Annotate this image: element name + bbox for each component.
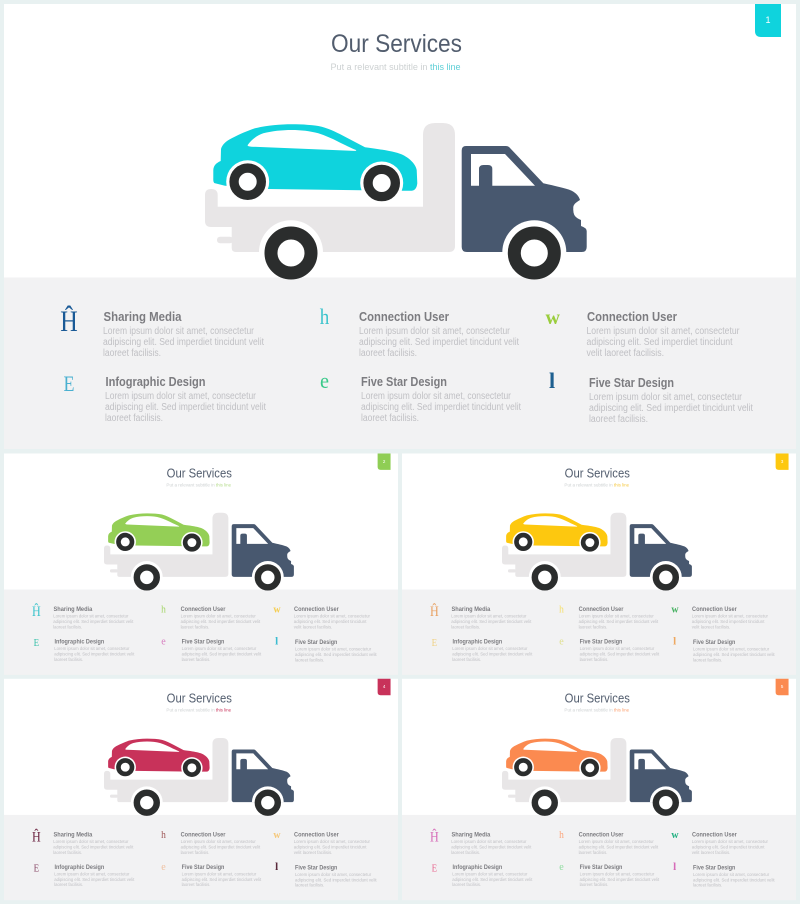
item text: Lorem ipsum dolor sit amet, consectetur (294, 839, 370, 845)
icon: E: E (64, 371, 74, 396)
item text (692, 614, 768, 631)
service item: Five Star Design (320, 368, 521, 424)
item text: laoreet facilisis. (53, 625, 82, 631)
item text: laoreet facilisis. (579, 625, 607, 631)
item text: adipiscing elit. Sed imperdiet tincidunt velit (53, 844, 134, 850)
item text: Lorem ipsum dolor sit amet, consectetur (54, 646, 130, 652)
item text: laoreet facilisis. (580, 657, 608, 663)
item text: adipiscing elit. Sed imperdiet tincidunt velit (589, 403, 753, 414)
item title: Five Star Design (182, 864, 224, 871)
services panel background (4, 278, 796, 449)
item text: adipiscing elit. Sed imperdiet tincidunt velit (182, 651, 262, 657)
icon: E: E (34, 862, 39, 874)
item text: laoreet facilisis. (451, 625, 480, 631)
item text: adipiscing elit. Sed imperdiet tincidunt velit (579, 619, 659, 625)
item text (586, 326, 740, 359)
item title: Connection User (181, 832, 226, 839)
service item: Connection User 2 (671, 830, 768, 856)
item text (452, 646, 533, 663)
item text (589, 392, 753, 425)
service item: Connection User (559, 604, 659, 631)
icon: E: E (432, 637, 437, 649)
icon: tow truck carrying car (502, 513, 692, 587)
icon: h: h (320, 304, 329, 329)
item text: Lorem ipsum dolor sit amet, consectetur (692, 839, 768, 845)
item text: Lorem ipsum dolor sit amet, consectetur (361, 391, 512, 402)
item text: Lorem ipsum dolor sit amet, consectetur (580, 646, 655, 652)
subtitle (564, 708, 629, 714)
item text: adipiscing elit. Sed imperdiet tincidunt velit (579, 844, 659, 850)
item title: Five Star Design (693, 864, 735, 871)
item text: Lorem ipsum dolor sit amet, consectetur (181, 839, 256, 845)
icon: e: e (320, 368, 329, 393)
service item: Infographic Design (34, 862, 135, 888)
slide background (402, 454, 796, 590)
service item: Connection User 2 (671, 605, 768, 631)
item text (54, 646, 135, 663)
item text (295, 872, 377, 889)
item text: Lorem ipsum dolor sit amet, consectetur (181, 614, 256, 620)
item text: laoreet facilisis. (54, 882, 83, 888)
icon: l: l (673, 861, 676, 873)
service item: Five Star Design (161, 636, 262, 663)
item text: adipiscing elit. Sed imperdiet tincidunt velit (361, 402, 521, 413)
icon: e: e (161, 636, 166, 648)
page badge: 3 (781, 459, 784, 464)
item text: Lorem ipsum dolor sit amet, consectetur (692, 614, 768, 620)
service item: Five Star Design 2 (673, 636, 775, 663)
icon: h: h (161, 604, 166, 616)
item title: Infographic Design (452, 864, 502, 871)
item title: Connection User (692, 832, 737, 839)
item text: laoreet facilisis. (361, 413, 419, 424)
item text: Lorem ipsum dolor sit amet, consectetur (295, 872, 371, 878)
item text (105, 391, 266, 424)
item title: Sharing Media (54, 832, 93, 839)
item title: Connection User (587, 309, 677, 324)
title: Our Services (331, 30, 462, 58)
service item: Connection User (320, 304, 519, 359)
item text: laoreet facilisis. (181, 625, 209, 631)
item title: Five Star Design (580, 639, 622, 646)
item text: adipiscing elit. Sed imperdiet tincidunt velit (54, 651, 135, 657)
item text: laoreet facilisis. (693, 657, 722, 663)
services panel background (4, 590, 398, 675)
item text: laoreet facilisis. (105, 413, 163, 424)
service item: Connection User 2 (273, 605, 370, 631)
item text: adipiscing elit. Sed imperdiet tincidunt velit (105, 402, 266, 413)
services panel background (4, 815, 398, 900)
item text (451, 839, 532, 856)
item text: laoreet facilisis. (451, 850, 480, 856)
service item: Infographic Design (432, 862, 533, 888)
item text: Lorem ipsum dolor sit amet, consectetur (451, 614, 527, 620)
item title: Five Star Design (361, 374, 447, 389)
item text: laoreet facilisis. (181, 850, 209, 856)
service item: Sharing Media (430, 603, 532, 631)
item title: Connection User (692, 606, 737, 613)
item text (580, 871, 660, 888)
icon: e: e (559, 636, 564, 648)
item text (54, 871, 135, 888)
item text: velit laoreet facilisis. (294, 625, 332, 631)
slide background (402, 679, 796, 815)
icon: h: h (161, 829, 166, 841)
item text: adipiscing elit. Sed imperdiet tincidunt (586, 337, 733, 348)
icon: tow truck carrying car (104, 513, 294, 587)
item text (579, 614, 659, 631)
item title: Connection User (294, 832, 339, 839)
item title: Five Star Design (295, 639, 337, 646)
service item: Five Star Design (161, 861, 262, 888)
service item: Infographic Design (34, 637, 135, 663)
icon: l: l (275, 861, 278, 873)
item text: Lorem ipsum dolor sit amet, consectetur (580, 871, 655, 877)
item text (103, 326, 264, 359)
service item: Five Star Design 2 (275, 636, 377, 663)
service item: Connection User (161, 829, 261, 856)
item text: Lorem ipsum dolor sit amet, consectetur (294, 614, 370, 620)
panel: main slide cyan (4, 4, 796, 449)
item text: Lorem ipsum dolor sit amet, consectetur (54, 871, 130, 877)
service item: Sharing Media (32, 603, 134, 631)
subtitle (564, 482, 629, 488)
service item: Infographic Design (64, 371, 266, 424)
subtitle: this line (216, 708, 231, 714)
item text: adipiscing elit. Sed imperdiet tincidunt velit (580, 877, 660, 883)
page badge: 1 (765, 15, 771, 25)
item text (181, 614, 261, 631)
item text (693, 647, 775, 663)
item text: laoreet facilisis. (103, 348, 161, 359)
item text: laoreet facilisis. (54, 657, 83, 663)
item text: adipiscing elit. Sed imperdiet tincidunt velit (181, 844, 261, 850)
item title: Five Star Design (580, 864, 622, 871)
icon: tow truck carrying car (205, 123, 587, 273)
item title: Connection User (579, 832, 624, 839)
item title: Infographic Design (106, 374, 206, 389)
subtitle: this line (614, 708, 629, 714)
icon: h: h (559, 829, 564, 841)
icon: H: Ĥ (430, 603, 439, 620)
service item: Connection User (559, 829, 659, 856)
item text: adipiscing elit. Sed imperdiet tincidunt velit (452, 877, 533, 883)
item text: adipiscing elit. Sed imperdiet tincidunt velit (451, 844, 532, 850)
services panel background (402, 815, 796, 900)
item title: Infographic Design (54, 864, 104, 871)
item text: Lorem ipsum dolor sit amet, consectetur (53, 614, 129, 620)
icon: tow truck carrying car (502, 738, 692, 813)
item text: laoreet facilisis. (182, 882, 210, 888)
item text: laoreet facilisis. (452, 657, 481, 663)
item text (182, 871, 262, 888)
item text: laoreet facilisis. (359, 348, 417, 359)
subtitle: this line (430, 62, 460, 73)
item text: adipiscing elit. Sed imperdiet tincidunt velit (182, 877, 262, 883)
item text: adipiscing elit. Sed imperdiet tincidunt velit (53, 619, 134, 625)
item text: Lorem ipsum dolor sit amet, consectetur (452, 871, 528, 877)
icon: w: w (273, 830, 281, 841)
icon: H: Ĥ (32, 828, 41, 845)
item text: Lorem ipsum dolor sit amet, consectetur (452, 646, 528, 652)
item title: Sharing Media (54, 606, 93, 613)
service item: Connection User 2 (273, 830, 370, 856)
item text: Lorem ipsum dolor sit amet, consectetur (693, 647, 769, 653)
item text: laoreet facilisis. (579, 850, 607, 856)
icon: l: l (275, 636, 278, 648)
page badge (776, 454, 789, 470)
item text: Lorem ipsum dolor sit amet, consectetur (586, 326, 740, 337)
item text: Lorem ipsum dolor sit amet, consectetur (182, 871, 257, 877)
item text: laoreet facilisis. (295, 657, 324, 663)
service item: Sharing Media (60, 305, 264, 359)
page badge (378, 679, 391, 695)
service item: Five Star Design 2 (673, 861, 775, 889)
item text: Lorem ipsum dolor sit amet, consectetur (693, 872, 769, 878)
item text (295, 647, 377, 663)
item text: Lorem ipsum dolor sit amet, consectetur (103, 326, 255, 337)
panel: small slide crimson (4, 679, 398, 900)
icon: h: h (559, 604, 564, 616)
item text (361, 391, 521, 424)
item text: laoreet facilisis. (53, 850, 82, 856)
item text (181, 839, 261, 856)
slide background (4, 4, 796, 278)
item text: Lorem ipsum dolor sit amet, consectetur (295, 647, 371, 653)
service item: Five Star Design (559, 636, 660, 663)
page badge: 4 (383, 684, 386, 689)
service item: Sharing Media (430, 828, 532, 856)
icon: e: e (161, 861, 166, 873)
panel: small slide orange (402, 679, 796, 900)
item text (359, 326, 519, 359)
item text: adipiscing elit. Sed imperdiet tincidunt velit (54, 877, 135, 883)
page badge: 5 (781, 684, 784, 689)
item text: Lorem ipsum dolor sit amet, consectetur (451, 839, 527, 845)
icon: E: E (34, 637, 39, 649)
item title: Connection User (579, 606, 624, 613)
item text (451, 614, 532, 631)
item title: Connection User (359, 309, 449, 324)
page badge (378, 454, 391, 470)
service item: Sharing Media (32, 828, 134, 856)
item text: laoreet facilisis. (452, 882, 481, 888)
page badge (776, 679, 789, 695)
service item: Connection User 2 (545, 307, 740, 359)
icon: H: Ĥ (60, 305, 78, 338)
item text: laoreet facilisis. (589, 414, 648, 425)
subtitle (166, 482, 231, 488)
service item: Five Star Design (559, 861, 660, 888)
item text (580, 646, 660, 663)
item title: Five Star Design (182, 639, 224, 646)
item title: Infographic Design (452, 639, 502, 646)
item title: Connection User (181, 606, 226, 613)
item text: laoreet facilisis. (693, 883, 722, 889)
item text (692, 839, 768, 856)
item text (182, 646, 262, 663)
item title: Five Star Design (589, 375, 674, 390)
item text (294, 839, 370, 856)
item text: adipiscing elit. Sed imperdiet tincidunt (294, 844, 367, 850)
item text: Lorem ipsum dolor sit amet, consectetur (579, 839, 654, 845)
item text: adipiscing elit. Sed imperdiet tincidunt velit (103, 337, 264, 348)
item text: adipiscing elit. Sed imperdiet tincidunt velit (451, 619, 532, 625)
item text: adipiscing elit. Sed imperdiet tincidunt velit (295, 652, 377, 658)
item text: adipiscing elit. Sed imperdiet tincidunt velit (693, 652, 775, 658)
title: Our Services (565, 692, 630, 706)
slide background (4, 454, 398, 590)
item title: Five Star Design (295, 864, 337, 871)
page badge (755, 4, 781, 37)
item title: Infographic Design (54, 639, 104, 646)
item text: Lorem ipsum dolor sit amet, consectetur (53, 839, 129, 845)
icon: l: l (673, 636, 676, 648)
page badge: 2 (383, 459, 386, 464)
item text: velit laoreet facilisis. (294, 850, 332, 856)
subtitle: Put a relevant subtitle in (166, 708, 215, 714)
item title: Sharing Media (452, 606, 491, 613)
panel: small slide green (4, 454, 398, 675)
title: Our Services (167, 692, 232, 706)
item text: laoreet facilisis. (295, 883, 324, 889)
icon: w: w (671, 605, 679, 616)
item text: Lorem ipsum dolor sit amet, consectetur (589, 392, 743, 403)
icon: H: Ĥ (430, 828, 439, 845)
item text: Lorem ipsum dolor sit amet, consectetur (182, 646, 257, 652)
icon: H: Ĥ (32, 603, 41, 620)
item title: Connection User (294, 606, 339, 613)
item text: velit laoreet facilisis. (692, 850, 730, 856)
item title: Sharing Media (104, 309, 182, 324)
item text: adipiscing elit. Sed imperdiet tincidunt velit (295, 877, 377, 883)
subtitle: Put a relevant subtitle in (166, 482, 215, 488)
service item: Infographic Design (432, 637, 533, 663)
icon: l: l (549, 368, 555, 393)
subtitle: Put a relevant subtitle in (330, 62, 428, 73)
item text (693, 872, 775, 889)
item text (53, 839, 134, 856)
item text: adipiscing elit. Sed imperdiet tincidunt (294, 619, 367, 625)
title: Our Services (167, 466, 232, 480)
icon: tow truck carrying car (104, 738, 294, 813)
subtitle: Put a relevant subtitle in (564, 708, 613, 714)
item text (53, 614, 134, 631)
item text: adipiscing elit. Sed imperdiet tincidunt velit (359, 337, 519, 348)
item text: velit laoreet facilisis. (692, 625, 730, 631)
item text: Lorem ipsum dolor sit amet, consectetur (579, 614, 654, 620)
item text: adipiscing elit. Sed imperdiet tincidunt velit (693, 877, 775, 883)
subtitle (166, 708, 231, 714)
item title: Five Star Design (693, 639, 735, 646)
item text: adipiscing elit. Sed imperdiet tincidunt velit (181, 619, 261, 625)
item text: adipiscing elit. Sed imperdiet tincidunt velit (452, 651, 533, 657)
subtitle: Put a relevant subtitle in (564, 482, 613, 488)
item text (452, 871, 533, 888)
item text (579, 839, 659, 856)
icon: w: w (671, 830, 679, 841)
services panel background (402, 590, 796, 675)
subtitle: this line (614, 482, 629, 488)
item text: Lorem ipsum dolor sit amet, consectetur (359, 326, 511, 337)
icon: w: w (273, 605, 281, 616)
item text: Lorem ipsum dolor sit amet, consectetur (105, 391, 257, 402)
icon: e: e (559, 861, 564, 873)
item text (294, 614, 370, 631)
panel: small slide yellow (402, 454, 796, 675)
slide background (4, 679, 398, 815)
item text: adipiscing elit. Sed imperdiet tincidunt velit (580, 651, 660, 657)
item text: laoreet facilisis. (580, 882, 608, 888)
service item: Connection User (161, 604, 261, 631)
icon: w: w (545, 307, 560, 329)
item text: laoreet facilisis. (182, 657, 210, 663)
service item: Five Star Design 2 (275, 861, 377, 889)
item text: velit laoreet facilisis. (586, 348, 664, 359)
title: Our Services (565, 466, 630, 480)
subtitle: this line (216, 482, 231, 488)
item title: Sharing Media (452, 832, 491, 839)
icon: E: E (432, 862, 437, 874)
item text: adipiscing elit. Sed imperdiet tincidunt (692, 619, 765, 625)
item text: adipiscing elit. Sed imperdiet tincidunt (692, 844, 765, 850)
service item: Five Star Design 2 (549, 368, 753, 425)
